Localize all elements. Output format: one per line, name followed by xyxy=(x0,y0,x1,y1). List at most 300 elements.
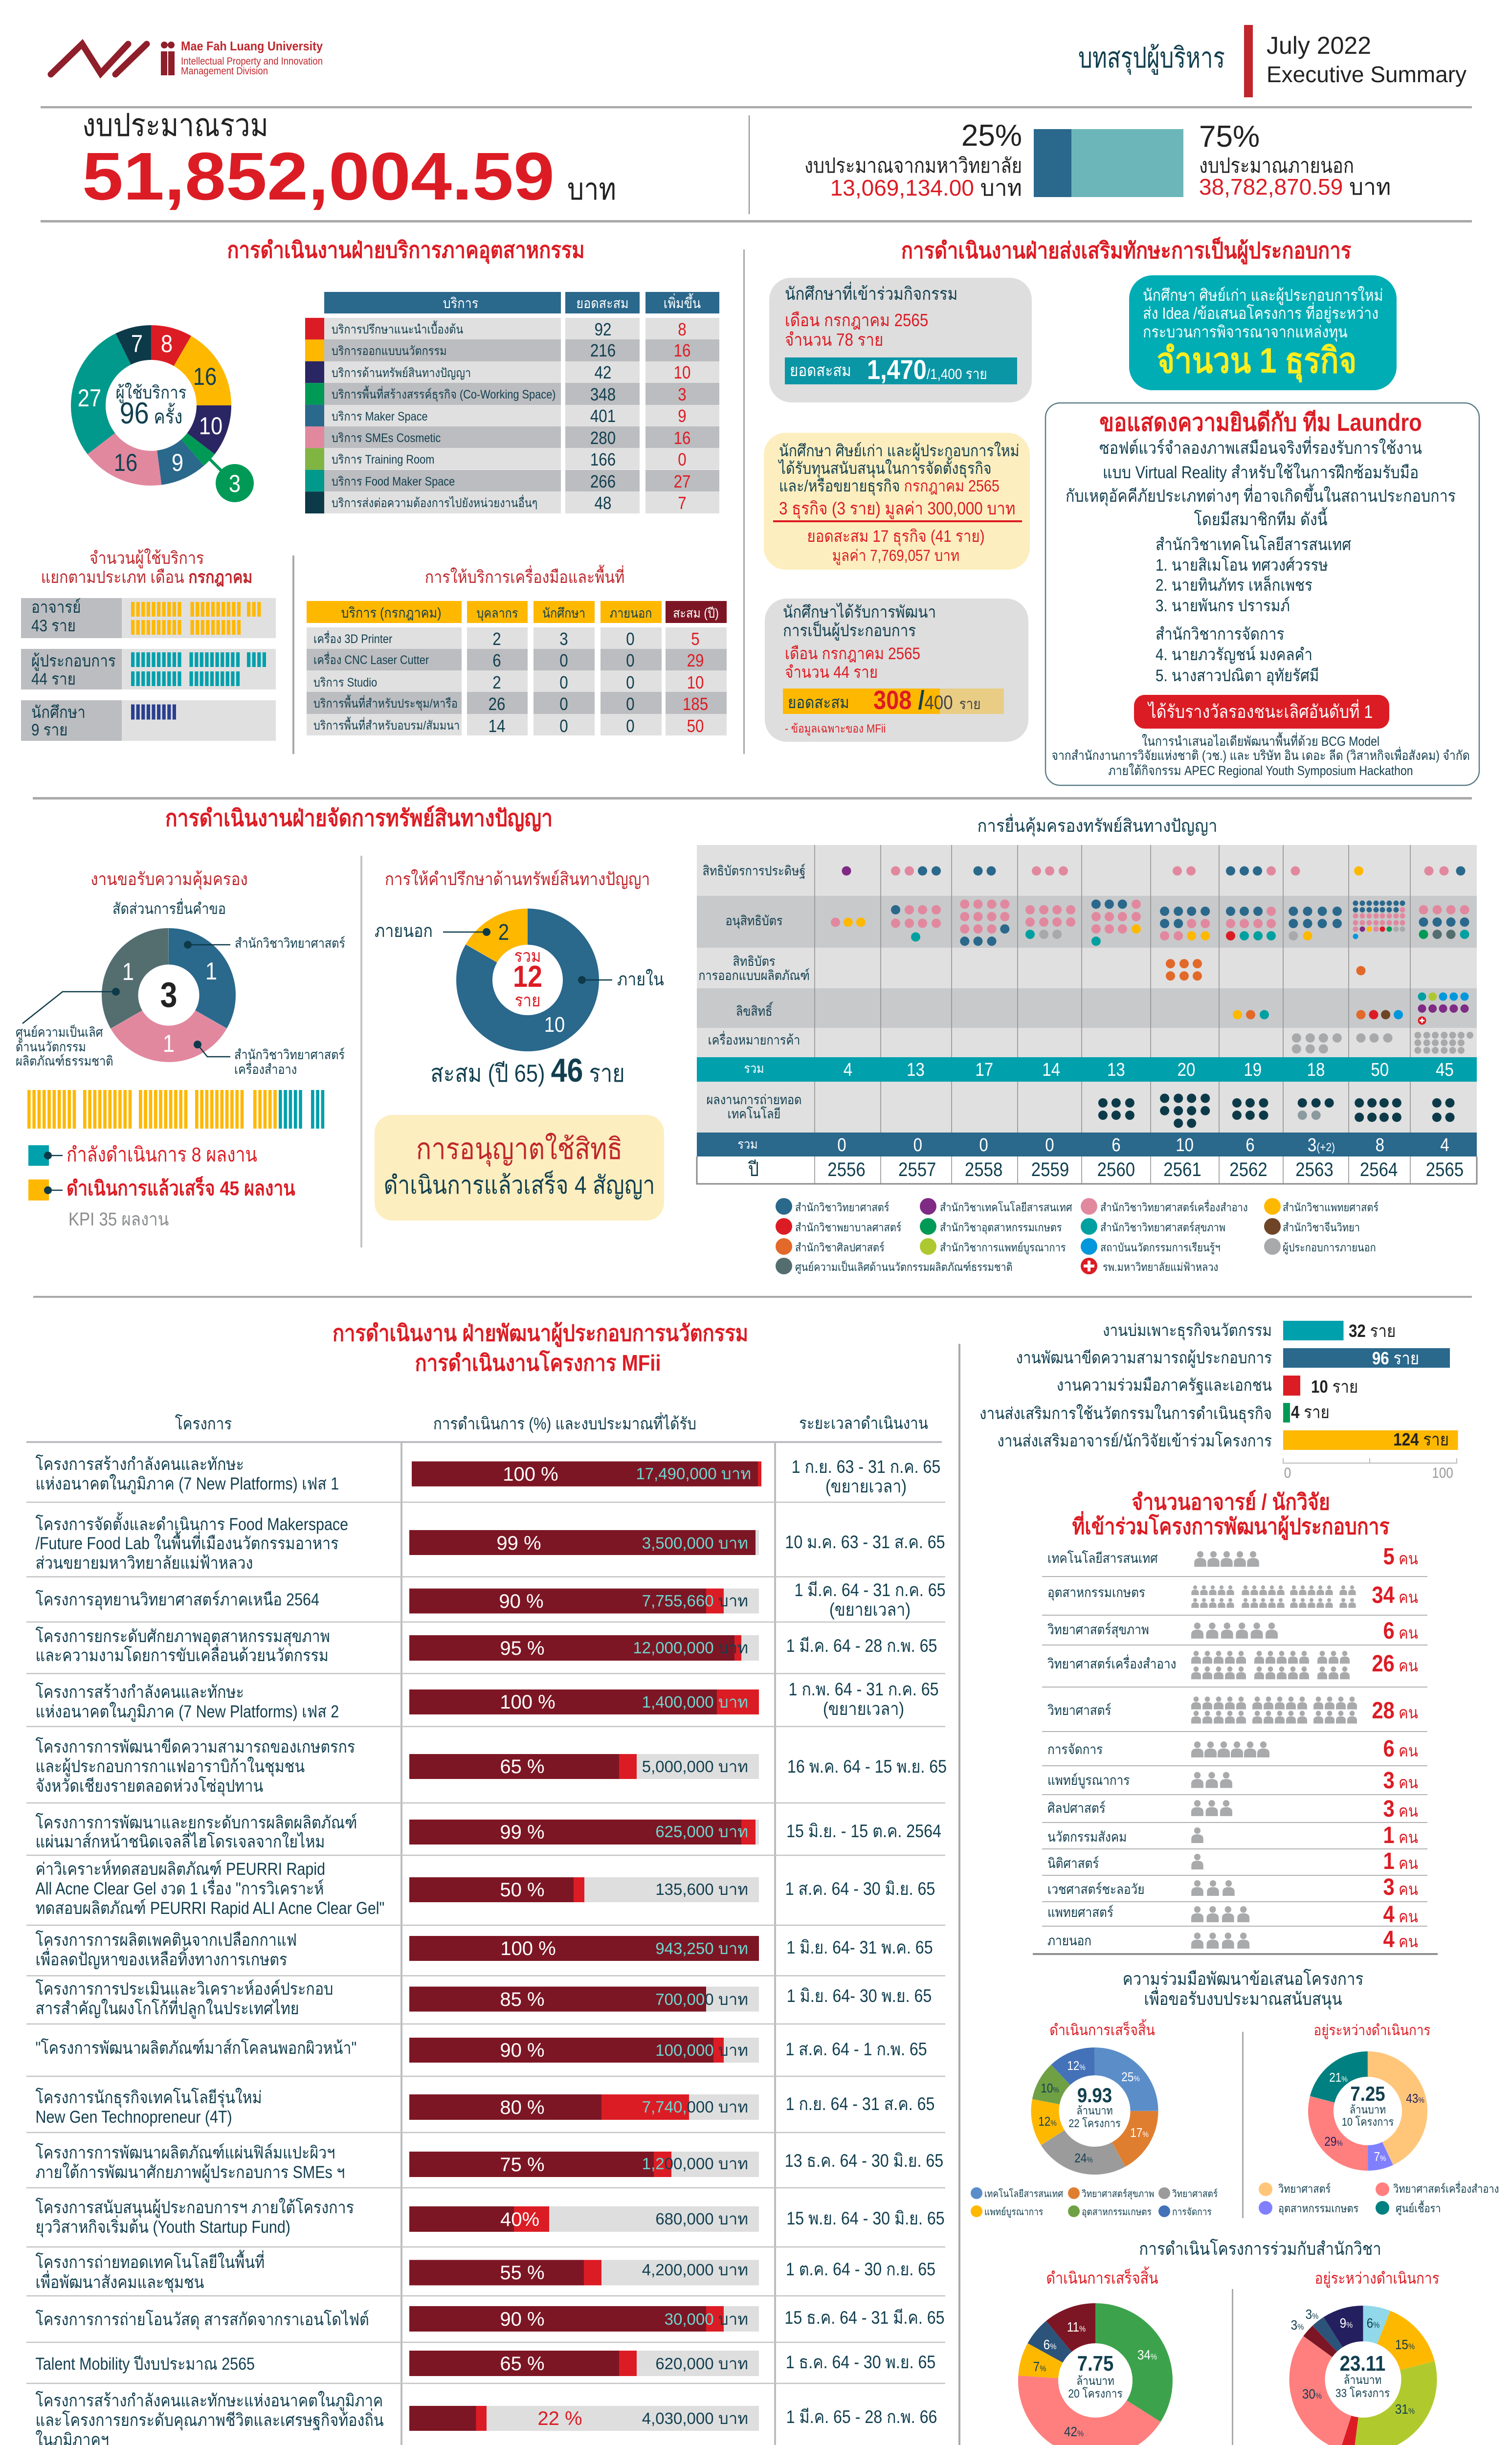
card: funding: มูลค่า 7,769,057 บาท xyxy=(832,547,959,565)
budgets xyxy=(633,1465,751,2445)
table: services: 92 xyxy=(595,320,611,340)
card: students joined: เดือน กรกฎาคม 2565 xyxy=(785,311,928,331)
table: services: 3 xyxy=(678,385,687,405)
card: congratulations team Laundro: จากสำนักงานการวิจัยแห่งชาติ (วช.) และ บริษัท อิน เดอะ ลีด (วิสาหกิจเพื่อสังคม) จำกัด xyxy=(1051,746,1470,763)
donut: proposals completed: แพทย์บูรณาการ xyxy=(984,2206,1043,2218)
budgets: 680,000 บาท xyxy=(655,2210,748,2228)
table: equipment and space: เครื่อง 3D Printer xyxy=(313,630,392,645)
donut: proposals in progress: 21% xyxy=(1329,2071,1348,2085)
project names: เพื่อพัฒนาสังคมและชุมชน xyxy=(35,2270,204,2293)
year row: 2561 xyxy=(1163,1158,1201,1180)
table: IP filings by year: การออกแบบผลิตภัณฑ์ xyxy=(698,969,810,983)
totals row: 50 xyxy=(1371,1059,1389,1080)
table: equipment and space: 0 xyxy=(626,716,635,736)
donut: service users: 96 ครั้ง xyxy=(120,397,182,430)
donut: proposals in progress: 7% xyxy=(1374,2150,1386,2164)
table: equipment and space: 6 xyxy=(492,651,501,671)
year row: 2565 xyxy=(1426,1158,1464,1180)
card: one business: นักศึกษา ศิษย์เก่า และผู้ประกอบการใหม่ xyxy=(1143,286,1383,305)
pictogram table: researchers by school: แพทยศาสตร์ xyxy=(1047,1904,1113,1920)
legend: schools: สำนักวิชาวิทยาศาสตร์สุขภาพ xyxy=(1100,1221,1225,1234)
progress bars: dark progress xyxy=(409,1462,759,2445)
project durations: 1 ก.พ. 64 - 31 ก.ค. 65 xyxy=(788,1680,939,1700)
donut: consulting: รวม xyxy=(514,946,541,966)
card: congratulations team Laundro: 4. นายภวรัญชน์ มงคลคำ xyxy=(1156,645,1312,664)
budgets: 135,600 บาท xyxy=(655,1880,748,1898)
project names: โครงการจัดตั้งและดำเนินการ Food Makerspace xyxy=(35,1512,348,1534)
legend: schools: สำนักวิชาจีนวิทยา xyxy=(1283,1221,1360,1234)
budgets: 7,755,660 บาท xyxy=(642,1592,748,1610)
project durations: 1 ส.ค. 64 - 30 มิ.ย. 65 xyxy=(785,1879,935,1899)
pictogram table: researchers by school: นิติศาสตร์ xyxy=(1047,1855,1099,1871)
year row: 2559 xyxy=(1031,1158,1069,1180)
card: student development: - ข้อมูลเฉพาะของ MFii xyxy=(785,722,886,735)
donut: proposals in progress: 29% xyxy=(1324,2135,1343,2149)
donut: joint completed: ล้านบาท xyxy=(1076,2375,1114,2387)
budgets: 4,200,000 บาท xyxy=(642,2261,748,2279)
project names: All Acne Clear Gel งวด 1 เรื่อง "การวิเคราะห์ xyxy=(35,1877,324,1898)
table: services: บริการออกแบบนวัตกรรม xyxy=(332,344,446,357)
donut: joint in progress: 6% xyxy=(1367,2315,1379,2331)
donut: filing proportion: ผลิตภัณฑ์ธรรมชาติ xyxy=(16,1054,113,1068)
panel: proposal collaboration: อยู่ระหว่างดำเนินการ xyxy=(1314,2022,1430,2040)
project names: โครงการการประเมินและวิเคราะห์องค์ประกอบ xyxy=(35,1979,333,1998)
donut: proposals completed xyxy=(971,2041,1218,2218)
project durations: 13 ธ.ค. 64 - 30 มิ.ย. 65 xyxy=(785,2151,943,2171)
donut: service users: 7 xyxy=(131,330,143,357)
donut: joint completed: 20 โครงการ xyxy=(1068,2387,1123,2400)
donut: proposals completed: เทคโนโลยีสารสนเทศ xyxy=(984,2188,1063,2199)
card: congratulations team Laundro: 3. นายพันกร ปรารมภ์ xyxy=(1156,596,1290,615)
progress percentages: 65 % xyxy=(500,2353,545,2375)
project names: โครงการสร้างกำลังคนและทักษะแห่งอนาคตในภูมิภาค xyxy=(35,2391,383,2411)
table: equipment and space: 29 xyxy=(687,651,704,671)
progress percentages: 100 % xyxy=(503,1464,558,1485)
transfer totals row: 0 xyxy=(979,1134,988,1156)
table: equipment and space: 0 xyxy=(626,629,635,649)
heading: การดำเนินงานฝ่ายจัดการทรัพย์สินทางปัญญา xyxy=(165,805,553,832)
project names: โครงการการถ่ายโอนวัสดุ สารสกัดจากราเอนโดไฟต์ xyxy=(35,2310,369,2330)
users by type: 44 ราย xyxy=(31,669,76,688)
donut: proposals completed: การจัดการ xyxy=(1172,2206,1212,2217)
table: equipment and space: เครื่อง CNC Laser Cutter xyxy=(313,651,429,667)
donut: filing proportion: ด้านนวัตกรรม xyxy=(16,1040,86,1054)
bar chart: work categories: 0 xyxy=(1284,1465,1291,1481)
pictogram table: researchers by school: อุตสาหกรรมเกษตร xyxy=(1047,1584,1145,1600)
project durations: 1 มี.ค. 65 - 28 ก.พ. 66 xyxy=(786,2407,937,2427)
donut: joint in progress: 3% xyxy=(1291,2317,1304,2333)
bar chart: work categories xyxy=(979,1321,1458,1481)
table: services: ยอดสะสม xyxy=(576,295,629,311)
bar chart: work categories: งานความร่วมมือภาครัฐและเอกชน xyxy=(1057,1376,1272,1396)
pictogram table: researchers by school: 3 คน xyxy=(1383,1873,1418,1900)
heading: lecturers and researchers: ที่เข้าร่วมโครงการพัฒนาผู้ประกอบการ xyxy=(1072,1511,1390,1540)
project names: /Future Food Lab ในพื้นที่เมืองนวัตกรรมอาหาร xyxy=(35,1531,339,1553)
bar chart: work categories: งานบ่มเพาะธุรกิจนวัตกรรม xyxy=(1103,1321,1272,1341)
project names: Talent Mobility ปีงบประมาณ 2565 xyxy=(35,2354,255,2373)
transfer totals row: 3(+2) xyxy=(1308,1134,1335,1156)
table header: ระยะเวลาดำเนินงาน xyxy=(799,1414,928,1432)
project names: ทดสอบผลิตภัณฑ์ PEURRI Rapid ALI Acne Clear Gel" xyxy=(35,1898,384,1917)
budgets: 1,200,000 บาท xyxy=(642,2155,748,2173)
bar chart: work categories: 124 ราย xyxy=(1393,1430,1449,1450)
budget split: 13,069,134.00 บาท xyxy=(830,175,1022,200)
panel: intellectual property xyxy=(16,805,1477,1274)
users by type: จำนวนผู้ใช้บริการ xyxy=(89,548,204,569)
dots: technology transfer xyxy=(1098,1093,1454,1128)
project durations: 1 มี.ค. 64 - 31 ก.ค. 65 xyxy=(794,1580,946,1600)
totals row: 19 xyxy=(1244,1059,1262,1080)
budgets: 625,000 บาท xyxy=(655,1823,748,1841)
pictogram table: researchers by school: 26 คน xyxy=(1372,1650,1418,1677)
project durations: 15 ธ.ค. 64 - 31 มี.ค. 65 xyxy=(784,2308,945,2328)
pictogram table: researchers by school: 1 คน xyxy=(1383,1822,1418,1848)
pictogram table: researchers by school: 28 คน xyxy=(1372,1697,1418,1724)
table: services: บริการ Maker Space xyxy=(332,410,428,423)
donut: filing proportion: 1 xyxy=(205,957,217,985)
table: equipment and space: 0 xyxy=(626,694,635,714)
donut: filing proportion: ศูนย์ความเป็นเลิศ xyxy=(16,1024,103,1040)
progress percentages: 75 % xyxy=(500,2154,545,2176)
table: equipment and space: ภายนอก xyxy=(610,606,652,621)
document title: Executive Summary xyxy=(1267,62,1467,87)
bar chart: work categories: 100 xyxy=(1432,1465,1453,1481)
project durations: 1 มิ.ย. 64- 31 พ.ค. 65 xyxy=(786,1938,933,1958)
donut: consulting: 10 xyxy=(544,1013,565,1037)
budgets: 3,500,000 บาท xyxy=(642,1534,748,1552)
donut: consulting: ภายใน xyxy=(617,969,664,990)
donut: joint in progress: 9% xyxy=(1340,2315,1353,2331)
bar chart: work categories: 10 ราย xyxy=(1311,1377,1358,1397)
table: IP filings by year: เครื่องหมายการค้า xyxy=(708,1031,800,1047)
heading: การดำเนินงาน ฝ่ายพัฒนาผู้ประกอบการนวัตกรรม xyxy=(333,1321,748,1347)
card: funding: ยอดสะสม 17 ธุรกิจ (41 ราย) xyxy=(807,527,985,547)
document title xyxy=(1078,25,1467,97)
panel: proposal collaboration: เพื่อขอรับงบประมาณสนับสนุน xyxy=(1144,1987,1342,2010)
donut: proposals completed: 24% xyxy=(1074,2152,1093,2165)
project durations: 1 ก.ย. 63 - 31 ก.ค. 65 xyxy=(792,1457,940,1477)
budgets: 4,030,000 บาท xyxy=(642,2409,748,2427)
donut: joint completed: 7% xyxy=(1033,2358,1046,2374)
pictogram table: researchers by school: 6 คน xyxy=(1383,1735,1418,1762)
table: services: 16 xyxy=(674,428,690,448)
donut: joint completed: 42% xyxy=(1064,2423,1084,2439)
card: congratulations team Laundro: 1. นายสิเมโอน ทศวงศ์วรรษ xyxy=(1156,556,1328,574)
transfer totals row: 6 xyxy=(1245,1134,1255,1156)
donut: joint in progress: 30% xyxy=(1302,2386,1322,2401)
project names xyxy=(35,1454,392,2445)
card: licensing xyxy=(375,1115,664,1221)
card: congratulations team Laundro: ในการนำเสนอไอเดียพัฒนาพื้นที่ด้วย BCG Model xyxy=(1142,732,1379,749)
budgets: 12,000,000 บาท xyxy=(633,1639,748,1657)
table: services: บริการ xyxy=(443,295,478,311)
project durations: 1 ส.ค. 64 - 1 ก.พ. 65 xyxy=(785,2040,927,2060)
table: services: บริการ SMEs Cosmetic xyxy=(332,431,441,445)
pictogram table: researchers by school xyxy=(1033,1543,1438,1955)
bar chart: work categories: 96 ราย xyxy=(1372,1349,1419,1369)
table: services: 401 xyxy=(590,406,616,426)
table: services: 266 xyxy=(590,472,616,492)
progress percentages: 99 % xyxy=(500,1822,545,1843)
table: equipment and space: 0 xyxy=(559,716,568,736)
project names: โครงการการพัฒนาขีดความสามารถของเกษตรกร xyxy=(35,1737,355,1756)
progress percentages: 55 % xyxy=(500,2262,545,2284)
project names: สารสำคัญในผงโกโก้ที่ปลูกในประเทศไทย xyxy=(35,1997,299,2019)
progress percentages: 85 % xyxy=(500,1989,545,2010)
table: equipment and space: บริการพื้นที่สำหรับอบรม/สัมมนา xyxy=(313,716,460,732)
donut: filing proportion: 3 xyxy=(160,976,177,1015)
totals row: 20 xyxy=(1178,1059,1195,1080)
project durations: 1 ธ.ค. 64 - 30 พ.ย. 65 xyxy=(786,2353,935,2373)
project durations: 1 มี.ค. 64 - 28 ก.พ. 65 xyxy=(786,1636,937,1656)
donut: proposals in progress: 43% xyxy=(1406,2092,1424,2106)
project names: "โครงการพัฒนาผลิตภัณฑ์มาส์กโคลนพอกผิวหน้า" xyxy=(35,2038,356,2057)
donut: service users xyxy=(63,317,254,502)
project names: จังหวัดเชียงรายตลอดห่วงโซ่อุปทาน xyxy=(35,1776,263,1797)
pictogram table: researchers by school: 5 คน xyxy=(1383,1543,1418,1570)
card: funding: ได้รับทุนสนับสนุนในการจัดตั้งธุรกิจ xyxy=(778,457,992,479)
totals row: 4 xyxy=(844,1059,852,1080)
budget split: งบประมาณภายนอก xyxy=(1199,155,1354,178)
table: equipment and space: 0 xyxy=(559,651,568,671)
table: equipment and space: บริการ (กรกฎาคม) xyxy=(341,604,442,621)
budget split: 25% xyxy=(961,119,1022,153)
legend: schools: สำนักวิชาวิทยาศาสตร์เครื่องสำอาง xyxy=(1100,1200,1248,1214)
project names: และความงามโดยการขับเคลื่อนด้วยนวัตกรรม xyxy=(35,1644,329,1665)
tally: entrepreneurs xyxy=(131,660,266,679)
card: licensing: การอนุญาตใช้สิทธิ xyxy=(416,1133,623,1167)
year row: 2562 xyxy=(1229,1158,1267,1180)
project names: ยุววิสาหกิจเริ่มต้น (Youth Startup Fund) xyxy=(35,2215,290,2238)
table: equipment and space: บริการพื้นที่สำหรับประชุม/หารือ xyxy=(313,694,458,711)
table: services: 166 xyxy=(590,450,616,470)
panel: proposal collaboration: ดำเนินการเสร็จสิ้น xyxy=(1049,2019,1155,2039)
progress percentages: 100 % xyxy=(500,1938,556,1959)
heading: การดำเนินงานฝ่ายบริการภาคอุตสาหกรรม xyxy=(227,238,585,265)
progress percentages: 99 % xyxy=(496,1533,541,1554)
project durations: 15 มิ.ย. - 15 ต.ค. 2564 xyxy=(786,1822,941,1842)
logo: Mae Fah Luang University xyxy=(181,39,323,53)
project names: โครงการการพัฒนาผลิตภัณฑ์แผ่นฟิล์มแปะผิวฯ xyxy=(35,2143,335,2162)
progress percentages: 95 % xyxy=(500,1638,545,1659)
totals row: 14 xyxy=(1042,1059,1060,1080)
table: services: บริการส่งต่อความต้องการไปยังหน่วยงานอื่นๆ xyxy=(332,494,537,510)
project durations: 16 พ.ค. 64 - 15 พ.ย. 65 xyxy=(787,1757,947,1777)
budgets: 5,000,000 บาท xyxy=(642,1757,748,1776)
bar chart: work categories: 32 ราย xyxy=(1349,1321,1396,1341)
progress bars: red increase xyxy=(409,1462,761,2445)
card: students joined xyxy=(769,278,1032,402)
project names: และโครงการยกระดับคุณภาพชีวิตและเศรษฐกิจท้องถิ่น xyxy=(35,2408,384,2431)
year row: 2558 xyxy=(965,1158,1002,1180)
project durations: 1 ต.ค. 64 - 30 ก.ย. 65 xyxy=(786,2260,935,2280)
transfer totals row: 8 xyxy=(1376,1134,1384,1156)
card: student development: เดือน กรกฎาคม 2565 xyxy=(785,644,920,663)
logo: Intellectual Property and Innovation xyxy=(181,56,323,67)
totals row: 13 xyxy=(907,1059,925,1080)
project names: แห่งอนาคตในภูมิภาค (7 New Platforms) เฟส 1 xyxy=(35,1474,339,1494)
table: services: บริการ Food Maker Space xyxy=(332,475,455,488)
donut: proposals completed: 22 โครงการ xyxy=(1068,2117,1121,2130)
table: IP filings by year: ผลงานการถ่ายทอด xyxy=(707,1093,801,1107)
icons: people xyxy=(1191,1551,1357,1949)
table: equipment and space: บุคลากร xyxy=(476,606,518,621)
totals row: 45 xyxy=(1436,1059,1454,1080)
users by type: นักศึกษา xyxy=(31,703,86,721)
budgets: 620,000 บาท xyxy=(655,2355,748,2373)
legend: schools: สถาบันนวัตกรรมการเรียนรู้ฯ xyxy=(1100,1241,1221,1254)
table: equipment and space: 0 xyxy=(559,673,568,693)
card: congratulations team Laundro: ภายใต้กิจกรรม APEC Regional Youth Symposium Hackathon xyxy=(1108,764,1413,778)
progress percentages: 90 % xyxy=(500,2040,545,2061)
panel: joint projects with schools xyxy=(985,2239,1492,2445)
project names: โครงการสนับสนุนผู้ประกอบการฯ ภายใต้โครงการ xyxy=(35,2198,354,2218)
panel: intellectual property: การให้คำปรึกษาด้านทรัพย์สินทางปัญญา xyxy=(385,869,650,889)
card: congratulations team Laundro xyxy=(1045,403,1479,785)
totals row: 17 xyxy=(975,1059,993,1080)
budgets: 7,740,000 บาท xyxy=(642,2098,748,2116)
table: IP filings by year: รวม xyxy=(737,1137,758,1152)
table: equipment and space: 185 xyxy=(683,694,708,714)
table header: โครงการ xyxy=(175,1414,232,1433)
pictogram table: researchers by school: เทคโนโลยีสารสนเทศ xyxy=(1047,1550,1158,1566)
donut: filing proportion: สำนักวิชาวิทยาศาสตร์ xyxy=(235,936,345,951)
pictogram table: researchers by school: 34 คน xyxy=(1372,1581,1418,1608)
project durations: (ขยายเวลา) xyxy=(825,1477,907,1497)
table: IP filings by year: การยื่นคุ้มครองทรัพย์สินทางปัญญา xyxy=(977,814,1218,837)
project durations: (ขยายเวลา) xyxy=(823,1699,904,1719)
project names: โครงการยกระดับศักยภาพอุตสาหกรรมสุขภาพ xyxy=(35,1626,330,1647)
card: one business: กระบวนการพิจารณาจากแหล่งทุน xyxy=(1143,323,1348,342)
budgets: 1,400,000 บาท xyxy=(642,1693,748,1711)
card: funding: และ/หรือขยายธุรกิจ กรกฎาคม 2565 xyxy=(779,477,1000,496)
table: services: บริการปรึกษาแนะนำเบื้องต้น xyxy=(332,320,463,336)
totals row: 18 xyxy=(1307,1059,1325,1080)
budgets: 30,000 บาท xyxy=(665,2310,748,2328)
card: students joined: จำนวน 78 ราย xyxy=(785,330,883,350)
budget total: งบประมาณรวม xyxy=(82,107,268,143)
panel: joint projects with schools: อยู่ระหว่างดำเนินการ xyxy=(1315,2270,1439,2288)
card: congratulations team Laundro: สำนักวิชาเทคโนโลยีสารสนเทศ xyxy=(1156,535,1351,554)
project names: โครงการสร้างกำลังคนและทักษะ xyxy=(35,1682,244,1701)
project names: โครงการการผลิตเพคตินจากเปลือกกาแฟ xyxy=(35,1930,297,1949)
users by type: 9 ราย xyxy=(31,720,67,739)
card: congratulations team Laundro: กับเหตุอัคคีภัยประเภทต่างๆ ที่อาจเกิดขึ้นในสถานประกอบการ xyxy=(1066,484,1456,507)
card: student development: ยอดสะสม xyxy=(788,693,849,711)
project durations xyxy=(782,1457,947,2445)
table: equipment and space: 3 xyxy=(559,629,568,649)
users by type: 43 ราย xyxy=(31,616,76,635)
card: student development: 308 /400 ราย xyxy=(873,685,981,715)
donut: proposals completed: อุตสาหกรรมเกษตร xyxy=(1082,2206,1152,2218)
table header: การดำเนินการ (%) และงบประมาณที่ได้รับ xyxy=(433,1412,696,1433)
pictogram table: researchers by school: 1 คน xyxy=(1383,1847,1418,1874)
legend: schools: สำนักวิชาการแพทย์บูรณาการ xyxy=(940,1241,1066,1254)
table: services: เพิ่มขึ้น xyxy=(664,293,701,311)
project names: แผ่นมาส์กหน้าชนิดเจลลี่ไฮโดรเจลจากใยไหม xyxy=(35,1830,325,1851)
legend: schools: รพ.มหาวิทยาลัยแม่ฟ้าหลวง xyxy=(1103,1261,1218,1273)
card: congratulations team Laundro: สำนักวิชาการจัดการ xyxy=(1156,624,1284,643)
project names: โครงการนักธุรกิจเทคโนโลยีรุ่นใหม่ xyxy=(35,2088,262,2108)
legend: works status: ดำเนินการแล้วเสร็จ 45 ผลงาน xyxy=(67,1176,295,1200)
card: congratulations team Laundro: ซอฟต์แวร์จำลองภาพเสมือนจริงที่รองรับการใช้งาน xyxy=(1099,436,1422,457)
card: congratulations team Laundro: แบบ Virtual Reality สำหรับใช้ในการฝึกซ้อมรับมือ xyxy=(1103,463,1419,482)
pictogram table: researchers by school: วิทยาศาสตร์เครื่องสำอาง xyxy=(1047,1654,1176,1671)
table: equipment and space: 0 xyxy=(626,651,635,671)
donut: proposals in progress: อุตสาหกรรมเกษตร xyxy=(1278,2202,1358,2215)
pictogram table: researchers by school: แพทย์บูรณาการ xyxy=(1047,1772,1130,1788)
table: services: 27 xyxy=(674,472,690,492)
panel: joint projects with schools: ดำเนินการเสร็จสิ้น xyxy=(1046,2267,1158,2287)
card: congratulations team Laundro: ได้รับรางวัลรองชนะเลิศอันดับที่ 1 xyxy=(1147,699,1373,722)
project names: โครงการการพัฒนาและยกระดับการผลิตผลิตภัณฑ์ xyxy=(35,1813,357,1832)
table: equipment and space: นักศึกษา xyxy=(542,606,585,621)
dots: copyright xyxy=(1233,993,1469,1025)
totals row: 13 xyxy=(1107,1059,1125,1080)
donut: joint in progress: 3% xyxy=(1306,2306,1318,2322)
pictogram table: researchers by school: นวัตกรรมสังคม xyxy=(1047,1829,1127,1845)
legend: schools: ผู้ประกอบการภายนอก xyxy=(1283,1241,1376,1254)
card: congratulations team Laundro: 2. นายทินภัทร เหล็กเพชร xyxy=(1156,575,1312,594)
donut: proposals completed: 17% xyxy=(1130,2126,1149,2140)
tally: works xyxy=(27,1090,326,1129)
transfer totals row: 0 xyxy=(1045,1134,1054,1156)
table: services: 9 xyxy=(678,406,687,426)
card: congratulations team Laundro: 5. นางสาวปณิตา อุทัยรัศมี xyxy=(1156,666,1319,686)
donut: service users: 27 xyxy=(78,384,101,412)
legend: schools: สำนักวิชาเทคโนโลยีสารสนเทศ xyxy=(940,1201,1072,1214)
budget total: บาท xyxy=(567,173,616,206)
donut: joint in progress xyxy=(1262,2300,1492,2445)
donut: joint in progress: ล้านบาท xyxy=(1344,2374,1381,2386)
budget split xyxy=(804,119,1391,200)
donut: proposals in progress: วิทยาศาสตร์เครื่องสำอาง xyxy=(1393,2181,1499,2195)
legend: works status: กำลังดำเนินการ 8 ผลงาน xyxy=(67,1144,257,1166)
donut: proposals in progress xyxy=(1259,2048,1499,2215)
table: equipment and space: 26 xyxy=(489,694,505,714)
budget split: งบประมาณจากมหาวิทยาลัย xyxy=(804,155,1022,178)
legend: schools xyxy=(776,1198,1379,1274)
table: equipment and space: 10 xyxy=(687,673,704,693)
year row xyxy=(748,1158,1464,1180)
table: IP filings by year: อนุสิทธิบัตร xyxy=(725,914,783,929)
donut: filing proportion: 1 xyxy=(122,958,134,985)
year row: 2556 xyxy=(827,1158,866,1180)
pictogram table: researchers by school: วิทยาศาสตร์สุขภาพ xyxy=(1047,1622,1149,1638)
donut: proposals in progress: 7.25 xyxy=(1350,2083,1385,2106)
dots: invention patents xyxy=(842,867,1465,875)
pictogram table: researchers by school: 4 คน xyxy=(1383,1926,1418,1953)
progress percentages: 90 % xyxy=(500,2309,545,2330)
table: IP filings by year: ลิขสิทธิ์ xyxy=(736,1001,774,1019)
card: student development xyxy=(765,599,1028,742)
donut: service users: 16 xyxy=(114,449,137,476)
transfer totals row: 10 xyxy=(1176,1134,1194,1156)
panel: industrial services xyxy=(21,238,745,754)
card: one business xyxy=(1129,275,1397,390)
donut: joint completed xyxy=(985,2300,1217,2445)
table: equipment and space: 5 xyxy=(691,629,700,649)
progress percentages: 90 % xyxy=(499,1591,544,1612)
table: services: บริการด้านทรัพย์สินทางปัญญา xyxy=(332,366,471,380)
table: IP filings by year: สิทธิบัตร xyxy=(733,955,775,969)
header xyxy=(41,25,1472,109)
progress percentages: 100 % xyxy=(500,1691,556,1713)
donut: filing proportion: 1 xyxy=(163,1030,175,1057)
table: equipment and space: 14 xyxy=(489,716,505,736)
table: services: 280 xyxy=(590,428,616,448)
pictogram table: researchers by school: วิทยาศาสตร์ xyxy=(1047,1702,1112,1718)
